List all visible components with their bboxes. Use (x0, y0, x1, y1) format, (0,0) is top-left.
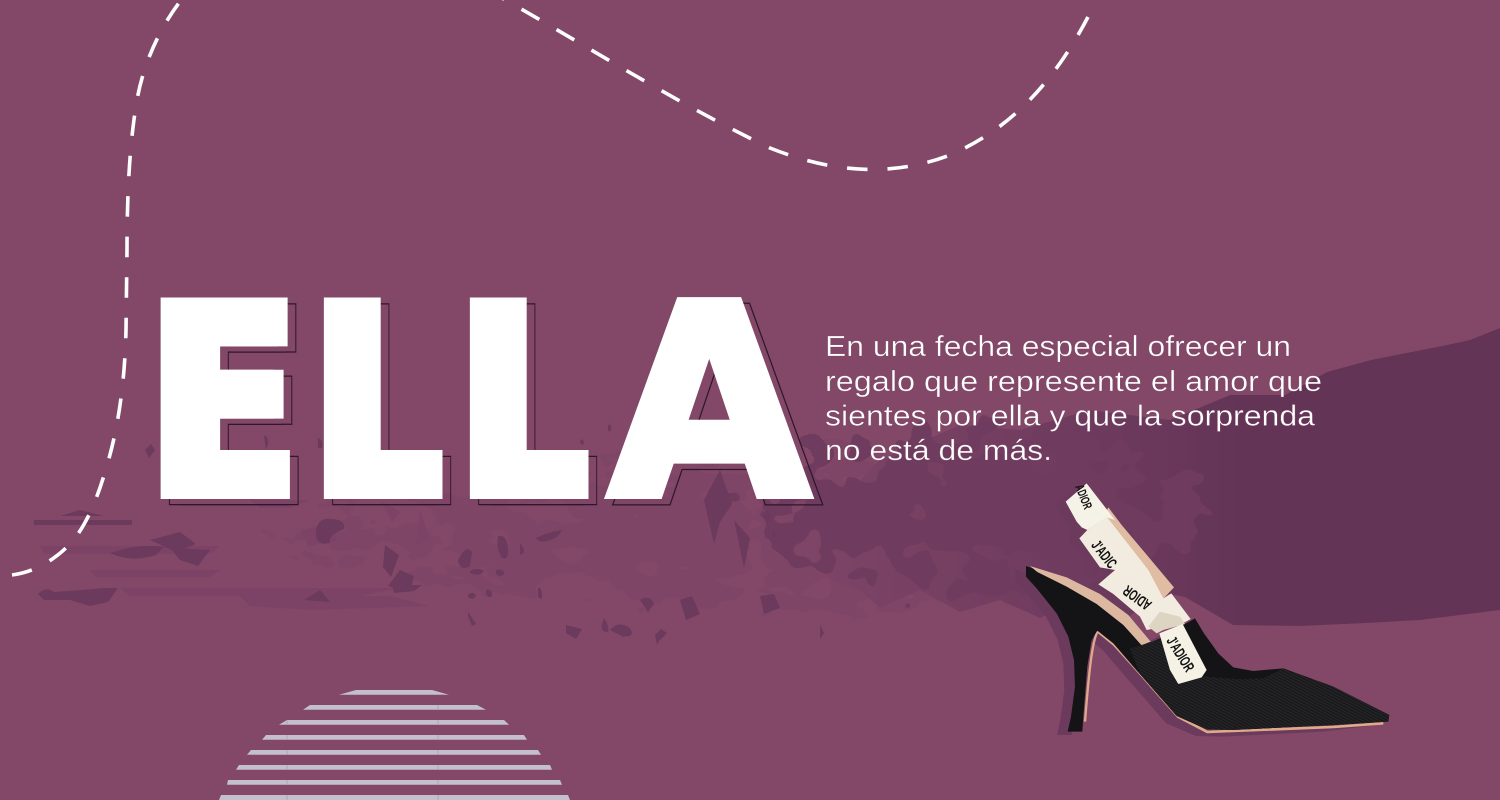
ribbon knot (1148, 612, 1185, 633)
shoe sole (1085, 631, 1383, 732)
strap (1103, 507, 1174, 599)
stain: darker mottling (660, 395, 1300, 625)
stain: splatter blobs (34, 425, 824, 645)
bow tag (1159, 624, 1207, 684)
title: ELLA: E (146, 252, 290, 554)
title: ELLA: L (311, 253, 430, 555)
title shadow outline (168, 302, 824, 506)
title shadow outline: L (320, 259, 439, 561)
title shadow outline: A (617, 256, 820, 565)
ribbon labels (1072, 483, 1198, 675)
title: ELLA: E (156, 252, 300, 554)
title: ELLA: L (457, 253, 576, 555)
shoe body (1026, 566, 1389, 732)
title shadow outline: L (332, 259, 452, 561)
body text: En una fecha especial ofrecer un (825, 331, 1291, 363)
ribbon labels: ADIOR (1072, 483, 1095, 512)
striped semicircle (219, 690, 570, 800)
body text (825, 331, 1322, 467)
ribbon top (1066, 483, 1115, 530)
dashed line: top curve (502, 0, 1088, 169)
ribbon labels: J'ADIC (1088, 536, 1121, 572)
shoe shadow (1015, 487, 1379, 737)
shoe illustration (1015, 483, 1389, 737)
shoe upper weave (1130, 639, 1389, 730)
body text: regalo que represente el amor que (825, 366, 1322, 398)
ink stain (34, 328, 1500, 645)
ribbon fold (1079, 517, 1191, 630)
title: ELLA: A (608, 250, 812, 559)
ribbon labels: J'ADIOR (1163, 633, 1198, 675)
title: ELLA (146, 250, 812, 559)
title shadow outline: E (155, 258, 299, 560)
heel lining (1030, 566, 1151, 645)
body text: no está de más. (825, 435, 1052, 467)
title: ELLA: L (324, 253, 443, 555)
title shadow outline: L (478, 259, 598, 561)
title: ELLA: L (470, 253, 589, 555)
title shadow outline: E (165, 258, 309, 560)
title shadow outline: L (466, 259, 585, 561)
stain: faded mottled texture (140, 430, 1500, 640)
stain: main brush stroke (815, 328, 1500, 626)
body text: sientes por ella y que la sorprenda (825, 400, 1316, 432)
stain: faint left streaks (40, 500, 430, 610)
dashed line: left curve (12, 0, 186, 575)
ribbon labels: ADIOR (1119, 582, 1155, 614)
